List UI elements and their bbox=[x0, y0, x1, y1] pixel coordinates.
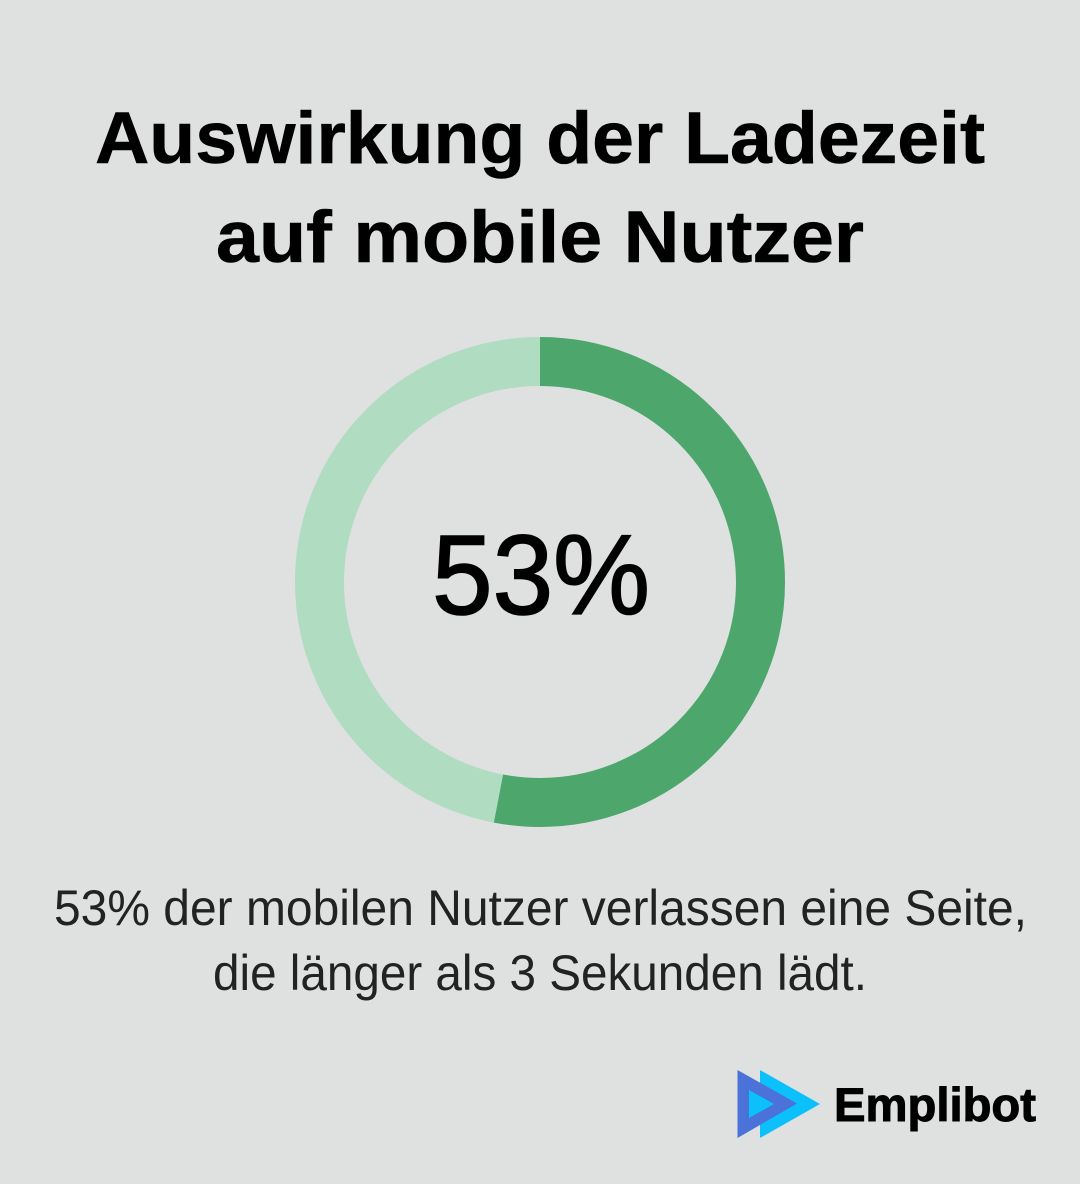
description text bbox=[54, 880, 1027, 1001]
description text: 53% der mobilen Nutzer verlassen eine Seite, bbox=[54, 880, 1027, 936]
donut chart: 53 percent bbox=[320, 362, 760, 802]
description text: die länger als 3 Sekunden lädt. bbox=[213, 945, 867, 1001]
title: auf mobile Nutzer bbox=[216, 197, 864, 278]
logo wordmark: Emplibot bbox=[834, 1078, 1036, 1131]
logo: Emplibot bbox=[738, 1070, 1036, 1138]
title: Auswirkung der Ladezeit bbox=[95, 98, 985, 179]
icon: play triangles bbox=[738, 1070, 820, 1138]
title bbox=[95, 98, 985, 278]
center value: 53% bbox=[432, 512, 650, 638]
